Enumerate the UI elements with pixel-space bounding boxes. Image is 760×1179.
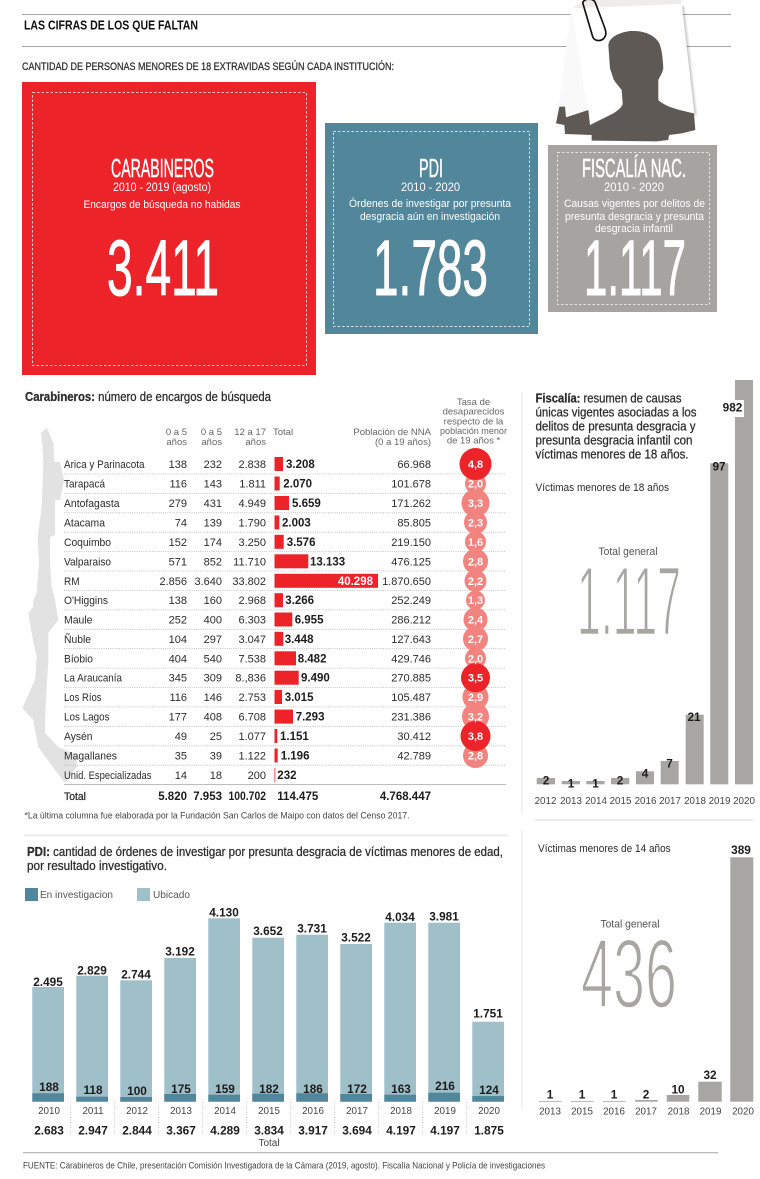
panel: PDI total: 2010 - 2020 [401, 182, 460, 194]
table column headers: años [201, 437, 222, 448]
rate bubbles [460, 448, 492, 768]
bar values: 1 [592, 776, 599, 790]
row: O'Higgins: 138 [169, 595, 187, 607]
values: ubicado: 3.522 [341, 931, 371, 945]
totals by year: 3.694 [342, 1124, 372, 1138]
bar values: 2 [617, 774, 624, 788]
row: O'Higgins: 252.249 [391, 595, 431, 607]
panel: PDI total [325, 123, 538, 334]
values: ubicado: 2.495 [33, 975, 63, 989]
values: ubicado: 2.829 [77, 964, 107, 978]
heading: Carabineros: Carabineros: número de encargos de búsqueda [25, 390, 271, 404]
years [539, 1107, 754, 1118]
rate bubbles: 2,0 [468, 478, 483, 490]
row: Los Ríos: 116 [169, 692, 187, 704]
row: Magallanes: 39 [210, 750, 222, 762]
row: Bíobio: 429.746 [391, 653, 431, 665]
heading: PDI: PDI: cantidad de órdenes de investigar por presunta desgracia de víctimas menores de edad, [27, 845, 503, 859]
table column headers: 0 a 5 [166, 427, 187, 438]
big number 436: 436 [581, 919, 677, 1029]
row: Tarapacá: 1.811 [239, 478, 266, 490]
values: ubicado: 1.751 [473, 1006, 503, 1020]
row: Los Lagos: Los Lagos [64, 712, 110, 724]
row: Magallanes: 1.122 [238, 750, 266, 762]
bar values: 1 [568, 776, 575, 790]
table column headers: desaparecidos [443, 407, 505, 418]
row: Total: 100.702 [228, 791, 266, 803]
row: Unid. Especializadas: 18 [210, 770, 222, 782]
row: Aysén: 1.151 [280, 731, 309, 743]
row: RM: RM [64, 576, 80, 588]
values: ubicado [33, 906, 503, 1020]
values: en investigacion: 118 [83, 1083, 103, 1097]
x axis years: 2012 [126, 1106, 148, 1117]
table column headers: Población de NNA [353, 427, 432, 438]
row: La Araucanía: 9.490 [301, 673, 330, 685]
years: 2017 [659, 796, 681, 807]
rate bubbles: 2,2 [468, 576, 483, 588]
row: Bíobio: Bíobio [64, 653, 93, 665]
row: Magallanes: 42.789 [397, 750, 431, 762]
values: ubicado: 3.981 [429, 910, 459, 924]
row: Coquimbo: 3.576 [287, 537, 315, 549]
panel: Fiscalía total: desgracia infantil [595, 223, 673, 235]
years [535, 796, 755, 807]
x axis years: 2013 [170, 1106, 192, 1117]
row: Arica y Parinacota: 232 [204, 459, 222, 471]
row: Tarapacá: 143 [204, 478, 222, 490]
rate bubbles: 2,0 [468, 653, 483, 665]
row: Antofagasta: 431 [204, 498, 222, 510]
table column headers [166, 397, 507, 448]
row: Aysén: 1.077 [238, 731, 266, 743]
row: Unid. Especializadas: 14 [175, 770, 187, 782]
x axis years: 2010 [38, 1106, 60, 1117]
row: Valparaiso [64, 554, 431, 568]
years: 2012 [535, 796, 556, 807]
row: Los Ríos: 3.015 [285, 692, 314, 704]
totals by year [34, 1124, 504, 1138]
row: Magallanes: Magallanes [64, 750, 117, 762]
heading: Fiscalía: presunta desgracia infantil con [536, 434, 693, 448]
rate bubbles: 1,3 [468, 595, 483, 607]
bar values: 1 [547, 1088, 554, 1102]
row: Antofagasta: 5.659 [292, 498, 321, 510]
row: RM [64, 574, 431, 588]
years: 2020 [733, 796, 755, 807]
totals by year: 3.367 [166, 1124, 196, 1138]
row: Los Ríos: 2.753 [238, 692, 266, 704]
panel: Carabineros total: Encargos de búsqueda no habidas [84, 199, 241, 211]
row: O'Higgins: 3.266 [285, 595, 314, 607]
row: Unid. Especializadas [64, 768, 296, 782]
row: Total: 7.953 [193, 791, 222, 803]
bar values: 2 [543, 774, 550, 788]
panel: Carabineros total: 2010 - 2019 (agosto) [113, 182, 211, 194]
x axis years: 2020 [478, 1106, 500, 1117]
row: Antofagasta [64, 496, 431, 510]
row: Arica y Parinacota: 138 [169, 459, 187, 471]
row: Aysén [64, 729, 431, 743]
heading: Fiscalía [536, 392, 696, 462]
row: Ñuble [64, 632, 431, 646]
values: en investigacion: 159 [215, 1082, 235, 1096]
values: en investigacion: 175 [171, 1082, 191, 1096]
row: Los Ríos: Los Ríos [64, 692, 102, 704]
total general label: Total general [600, 919, 660, 931]
panel: Fiscalía total: FISCALÍA NAC. [582, 153, 686, 183]
row: O'Higgins: 2.968 [238, 595, 266, 607]
years: 2017 [635, 1107, 657, 1118]
x axis years: 2014 [214, 1106, 236, 1117]
row: Bíobio: 7.538 [238, 653, 266, 665]
row: Atacama: 1.790 [238, 517, 266, 529]
values: en investigacion: 163 [391, 1082, 411, 1096]
totals by year: 1.875 [474, 1124, 504, 1138]
rate bubbles: 2,8 [468, 556, 483, 568]
bar values: 2 [643, 1088, 650, 1102]
values: ubicado: 2.744 [121, 968, 151, 982]
row: Antofagasta: 171.262 [391, 498, 431, 510]
values: en investigacion [39, 1079, 499, 1098]
row: Coquimbo: 219.150 [391, 537, 431, 549]
row: Total [64, 791, 431, 803]
bar values [543, 400, 743, 790]
panel: Carabineros total [22, 82, 316, 375]
rate bubbles: 4,8 [468, 459, 483, 471]
row: Arica y Parinacota: 3.208 [286, 459, 315, 471]
row: O'Higgins: 160 [204, 595, 222, 607]
values: en investigacion: 124 [479, 1083, 499, 1097]
row: Los Lagos [64, 710, 431, 724]
bar values: 982 [723, 400, 743, 414]
table column headers: 0 a 5 [201, 427, 222, 438]
row: Maule: Maule [64, 614, 92, 626]
totals by year: 3.917 [298, 1124, 328, 1138]
bar values: 32 [703, 1068, 717, 1082]
panel: Fiscalía total [548, 145, 717, 312]
row: Total: Total [64, 791, 86, 803]
map: Chile silhouette [22, 428, 77, 783]
x axis years: 2019 [434, 1106, 456, 1117]
row: RM: 40.298 [338, 576, 374, 588]
bar values [547, 843, 751, 1102]
row: Coquimbo: 3.250 [238, 537, 266, 549]
totals by year: 2.683 [34, 1124, 64, 1138]
totals by year: 3.834 [254, 1124, 284, 1138]
bars: ubicado [32, 918, 504, 1102]
values: ubicado: 3.731 [297, 922, 327, 936]
row: La Araucanía: 345 [169, 673, 187, 685]
legend: Ubicado [153, 889, 190, 901]
rate bubbles: 2,4 [468, 614, 484, 626]
row: Unid. Especializadas: Unid. Especializadas [64, 770, 152, 782]
row: RM: 3.640 [194, 576, 222, 588]
bar values: 389 [731, 843, 751, 857]
panel: Fiscalía total: 2010 - 2020 [604, 182, 664, 194]
rate bubbles: 2,3 [468, 517, 483, 529]
row: Maule [64, 612, 431, 626]
values: en investigacion: 100 [127, 1084, 147, 1098]
row: O'Higgins [64, 593, 431, 607]
row: Bíobio: 404 [169, 653, 187, 665]
row: Valparaiso: 13.133 [310, 556, 345, 568]
bar values: 21 [687, 710, 701, 724]
years: 2019 [709, 796, 730, 807]
row: Atacama: 74 [175, 517, 187, 529]
panel: Fiscalía total: Causas vigentes por delitos de [564, 198, 705, 210]
totals by year: 4.197 [430, 1124, 460, 1138]
table column headers: de 19 años * [447, 436, 500, 447]
years: 2013 [539, 1107, 561, 1118]
years: 2013 [560, 796, 582, 807]
row: Aysén: Aysén [64, 731, 92, 743]
row: Atacama: 85.805 [397, 517, 431, 529]
table column headers: población menor [440, 426, 507, 437]
row: Ñuble: 3.047 [238, 634, 266, 646]
row: RM: 33.802 [232, 576, 266, 588]
row: Aysén: 25 [210, 731, 222, 743]
subtitle: CANTIDAD DE PERSONAS MENORES DE 18 EXTRAVIDAS SEGÚN CADA INSTITUCIÓN: [22, 60, 394, 73]
values: ubicado: 3.652 [253, 924, 283, 938]
heading: Fiscalía: Fiscalía: resumen de causas [536, 392, 682, 406]
bars: en investigacion [32, 1093, 504, 1102]
x axis years: 2017 [346, 1106, 368, 1117]
title: LAS CIFRAS DE LOS QUE FALTAN [24, 18, 198, 32]
row: Antofagasta: 279 [169, 498, 187, 510]
row: Coquimbo: 174 [204, 537, 222, 549]
years: 2014 [585, 796, 607, 807]
row: Maule: 252 [169, 614, 187, 626]
heading: PDI [27, 845, 503, 873]
row: Tarapacá: 116 [169, 478, 187, 490]
x axis years [38, 1106, 500, 1117]
row: Maule: 400 [204, 614, 222, 626]
values: ubicado: 3.192 [165, 944, 195, 958]
panel: PDI total: desgracia aún en investigación [360, 211, 500, 223]
row: Ñuble: 104 [169, 634, 187, 646]
heading: Fiscalía: víctimas menores de 18 años. [536, 448, 688, 462]
x axis years: 2011 [82, 1106, 104, 1117]
row: Tarapacá: Tarapacá [64, 478, 106, 490]
row: Los Lagos: 6.708 [238, 712, 266, 724]
row: Arica y Parinacota: Arica y Parinacota [64, 459, 145, 471]
row: Los Ríos: 146 [204, 692, 222, 704]
table column headers: años [166, 437, 187, 448]
footnote: *La última columna fue elaborada por la Fundación San Carlos de Maipo con datos del Censo 2017. [24, 810, 410, 822]
values: en investigacion: 216 [435, 1079, 455, 1093]
heading: Fiscalía: delitos de presunta desgracia y [536, 420, 696, 434]
panel: PDI total: PDI [419, 153, 443, 183]
icon: silhouette photo with paperclip [556, 0, 697, 141]
row: Atacama [64, 515, 431, 529]
table column headers: respecto de la [444, 416, 504, 428]
row: RM: 1.870.650 [382, 576, 431, 588]
row: Arica y Parinacota [64, 457, 431, 471]
row: Maule: 6.303 [238, 614, 266, 626]
heading: Fiscalía: únicas vigentes asociadas a los [536, 406, 696, 420]
row: Atacama: Atacama [64, 517, 106, 529]
years: 2018 [668, 1107, 690, 1118]
row: Maule: 286.212 [391, 614, 431, 626]
row: Valparaiso: Valparaiso [64, 556, 111, 568]
row: Magallanes: 35 [175, 750, 187, 762]
table column headers: Total [273, 427, 293, 438]
values: en investigacion: 172 [347, 1082, 367, 1096]
row: Arica y Parinacota: 66.968 [397, 459, 431, 471]
subheading: under 18: Víctimas menores de 18 años [536, 482, 669, 494]
row: Los Lagos: 7.293 [296, 712, 324, 724]
row: Total: 4.768.447 [380, 791, 431, 803]
panel: PDI total: Órdenes de investigar por presunta [349, 197, 512, 210]
values: ubicado: 4.034 [385, 910, 415, 924]
row: Ñuble: 127.643 [391, 634, 431, 646]
panel: PDI bar chart [25, 845, 504, 1149]
row: Los Lagos: 231.386 [391, 712, 431, 724]
rate bubbles: 3,8 [468, 731, 483, 743]
values: en investigacion: 182 [259, 1082, 279, 1096]
row: Valparaiso: 852 [204, 556, 222, 568]
years: 2018 [684, 796, 706, 807]
row: La Araucanía: 309 [204, 673, 222, 685]
table column headers: Tasa de [457, 397, 490, 408]
years: 2015 [610, 796, 632, 807]
panel: Fiscalía under 18 chart [535, 380, 755, 807]
row: Tarapacá [64, 476, 431, 490]
row: Antofagasta: Antofagasta [64, 498, 120, 510]
row: Bíobio: 540 [204, 653, 222, 665]
rate bubbles: 3,2 [468, 712, 483, 724]
row: Los Lagos: 177 [169, 712, 187, 724]
bar values: 4 [642, 766, 649, 780]
bar values: 1 [579, 1088, 586, 1102]
row: Magallanes [64, 748, 431, 762]
years: 2020 [732, 1107, 754, 1118]
totals by year: 4.289 [210, 1124, 240, 1138]
row: Atacama: 2.003 [282, 517, 311, 529]
row: Unid. Especializadas: 200 [248, 770, 266, 782]
values: en investigacion: 188 [39, 1080, 59, 1094]
row: Tarapacá: 2.070 [283, 478, 312, 490]
rate bubbles: 2,8 [468, 750, 483, 762]
panel: Carabineros total: CARABINEROS [111, 153, 214, 183]
totals caption: Total [258, 1138, 280, 1149]
row: Total: 5.820 [158, 791, 187, 803]
row: Valparaiso: 476.125 [391, 556, 431, 568]
x axis years: 2016 [302, 1106, 324, 1117]
panel: Carabineros total: 3.411 [107, 223, 219, 312]
row: La Araucanía: 270.885 [391, 673, 431, 685]
row: Aysén: 30.412 [397, 731, 431, 743]
totals by year: 4.197 [386, 1124, 416, 1138]
bars [537, 380, 753, 784]
years: 2016 [635, 796, 657, 807]
row: Maule: 6.955 [295, 614, 324, 626]
table column headers: 12 a 17 [234, 427, 266, 438]
row: La Araucanía: 8.,836 [235, 673, 266, 685]
years: 2016 [603, 1107, 625, 1118]
bar values: 1 [611, 1088, 618, 1102]
row: Coquimbo: 152 [169, 537, 187, 549]
subheading: under 14: Víctimas menores de 14 años [538, 843, 671, 855]
row: Los Ríos [64, 690, 431, 704]
table rows and bars [64, 457, 431, 803]
row: Los Ríos: 105.487 [391, 692, 431, 704]
rate bubbles: 2,7 [468, 634, 483, 646]
bar values: 97 [712, 460, 726, 474]
bar values: 7 [666, 756, 673, 770]
total general label: Total general [598, 546, 658, 558]
row: Magallanes: 1.196 [281, 750, 309, 762]
row: Bíobio [64, 651, 431, 665]
panel: Carabineros table [24, 390, 507, 822]
rate bubbles: 3,3 [468, 498, 483, 510]
source footer: FUENTE: Carabineros de Chile, presentación Comisión Investigadora de la Cámara (2019, agosto). Fiscalía Nacional y Policía de investigaciones [23, 1160, 545, 1172]
row: Los Lagos: 408 [204, 712, 222, 724]
row: Total: 114.475 [277, 791, 319, 803]
heading: PDI: por resultado investigativo. [27, 859, 167, 873]
table column headers: (0 a 19 años) [375, 437, 431, 448]
years: 2019 [700, 1107, 721, 1118]
legend: En investigacion [40, 889, 113, 901]
x axis years: 2018 [390, 1106, 412, 1117]
row: RM: 2.856 [159, 576, 187, 588]
values: ubicado: 4.130 [209, 906, 239, 920]
totals by year: 2.844 [122, 1124, 152, 1138]
row: La Araucanía [64, 671, 431, 685]
row: Ñuble: 297 [204, 634, 222, 646]
x axis years: 2015 [258, 1106, 280, 1117]
panel: Fiscalía total: presunta desgracia y presunta [565, 211, 705, 223]
row: Ñuble: 3.448 [285, 634, 314, 646]
row: Ñuble: Ñuble [64, 633, 91, 646]
panel: Fiscalía under 14 chart [538, 843, 754, 1118]
bar values: 10 [671, 1082, 685, 1096]
table column headers: años [245, 437, 266, 448]
values: en investigacion: 186 [303, 1082, 323, 1096]
legend [25, 888, 190, 901]
panel: PDI total: 1.783 [373, 223, 488, 312]
totals by year: 2.947 [78, 1124, 108, 1138]
row: Coquimbo: Coquimbo [64, 537, 111, 549]
bars [539, 857, 753, 1102]
row: Antofagasta: 4.949 [238, 498, 266, 510]
rate bubbles: 3,5 [468, 673, 483, 685]
row: Bíobio: 8.482 [298, 653, 326, 665]
row: Arica y Parinacota: 2.838 [238, 459, 266, 471]
row: Valparaiso: 571 [169, 556, 187, 568]
row: Unid. Especializadas: 232 [277, 770, 296, 782]
row: Tarapacá: 101.678 [391, 478, 431, 490]
row: Valparaiso: 11.710 [233, 556, 266, 568]
rate bubbles: 2,9 [468, 692, 483, 704]
row: O'Higgins: O'Higgins [64, 595, 108, 607]
row: Atacama: 139 [204, 517, 222, 529]
rate bubbles: 1,6 [468, 537, 483, 549]
row: La Araucanía: La Araucanía [64, 673, 123, 685]
row: Aysén: 49 [175, 731, 187, 743]
row: Coquimbo [64, 535, 431, 549]
years: 2015 [571, 1107, 593, 1118]
